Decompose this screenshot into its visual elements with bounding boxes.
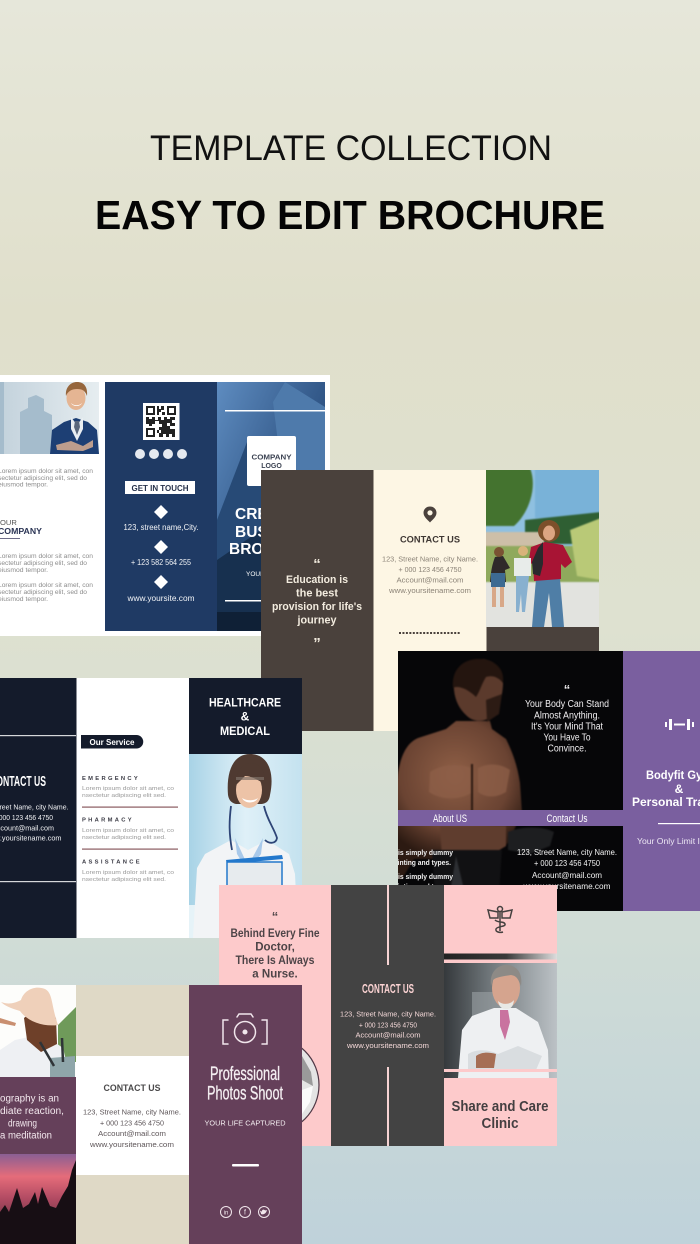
student in red shirt	[528, 520, 572, 627]
left text	[398, 850, 453, 885]
dark quote column: ”	[313, 635, 321, 652]
panel: navy contact column	[105, 382, 217, 631]
logo box: COMPANY	[252, 454, 292, 462]
heading block: healthcare and medical	[189, 678, 302, 754]
pink quote column: “	[272, 909, 278, 924]
text block: lorem bottom: Lorem ipsum dolor sit amet, con	[0, 582, 93, 589]
icon: qr code	[143, 403, 180, 440]
text block: lorem top: sectetur adipiscing elit, sed do	[0, 475, 87, 482]
cover heading: Professional	[210, 1064, 280, 1085]
plum text block: a meditation	[0, 1130, 52, 1142]
photo: students	[484, 468, 601, 629]
quote text: “	[564, 682, 570, 697]
dark contact column	[331, 885, 444, 1146]
pink quote column: a Nurse.	[252, 968, 298, 980]
cover tagline: YOUR TAGLINE	[246, 571, 294, 578]
contact text: www.yoursitename.com	[522, 882, 610, 891]
service: assistance: Lorem ipsum dolor sit amet, co	[82, 870, 174, 876]
icon: caduceus	[488, 906, 512, 932]
service: emergency: Lorem ipsum dolor sit amet, co	[82, 786, 174, 792]
icon: camera	[223, 1014, 267, 1044]
quote text: Almost Anything.	[534, 710, 600, 722]
cream contact column: CONTACT US	[400, 534, 461, 546]
cover title: CREATIVE	[235, 506, 312, 523]
service: assistance: nsectetur adipiscing elit sed.	[82, 877, 166, 883]
cream contact column	[374, 470, 486, 731]
cream contact column: + 000 123 456 4750	[398, 565, 462, 574]
text block: lorem bottom	[0, 553, 93, 603]
phone: + 123 582 564 255	[131, 558, 192, 567]
black photo column	[394, 651, 623, 911]
service: assistance	[82, 860, 174, 883]
quote text: Convince.	[548, 744, 586, 754]
pink quote column: Doctor,	[255, 942, 295, 954]
plum text block: drawing	[8, 1118, 37, 1130]
panel: photography brochure	[0, 985, 302, 1244]
middle beige column: + 000 123 456 4750	[100, 1118, 164, 1128]
cream contact column: www.yoursitename.com	[388, 586, 471, 595]
heading: our company: OUR	[0, 518, 17, 527]
panel: education brochure	[261, 468, 601, 731]
photo: woman in hat	[0, 985, 76, 1077]
middle beige column: www.yoursitename.com	[89, 1140, 174, 1149]
white services column	[76, 678, 189, 938]
dark quote column: the best	[296, 588, 338, 600]
quote text: It's Your Mind That	[531, 722, 603, 732]
panel: corporate business brochure	[0, 375, 330, 636]
contact text: + 000 123 456 4750	[534, 859, 601, 868]
service: emergency: EMERGENCY	[82, 776, 140, 782]
left text: is simply dummy	[398, 874, 453, 881]
service: emergency	[82, 776, 174, 799]
icon: web diamond	[154, 575, 168, 589]
photo: male doctor	[444, 963, 557, 1078]
left text: rinting and types.	[395, 884, 451, 891]
address: 123, street name,City.	[124, 523, 198, 532]
icons: social: f	[244, 1210, 246, 1216]
photo: athlete	[398, 658, 554, 885]
plum text block: ography is an	[0, 1094, 59, 1104]
contact text: Account@mail.com	[532, 871, 602, 880]
button: get in touch: GET IN TOUCH	[132, 484, 189, 493]
tagline: YOUR LIFE CAPTURED	[204, 1118, 286, 1128]
icon: phone diamond	[154, 540, 168, 554]
dark contact column: 123, Street Name, city Name.	[340, 1010, 436, 1018]
panel: healthcare brochure	[0, 678, 302, 938]
cream contact column: Account@mail.com	[396, 576, 464, 584]
dark contact column: Account@mail.com	[356, 1030, 420, 1040]
stethoscope	[230, 806, 277, 850]
service: pharmacy: nsectetur adipiscing elit sed.	[82, 835, 166, 841]
purple cover column	[623, 651, 700, 911]
dark contact column: www.yoursitename.com	[346, 1041, 429, 1050]
circular photo fragment	[223, 1037, 319, 1133]
quote text: You Have To	[544, 732, 591, 744]
dark contact column: + 000 123 456 4750	[359, 1020, 417, 1030]
plum text block	[0, 1077, 76, 1154]
dark footer block	[486, 627, 599, 731]
heading block: healthcare and medical: MEDICAL	[220, 724, 270, 738]
icon: dumbbell	[665, 719, 694, 730]
contact text: 123, Street Name, city Name.	[517, 848, 617, 857]
cover title	[230, 508, 261, 554]
navy contact column	[0, 678, 76, 938]
text block: lorem bottom: sectetur adipiscing elit, sed do	[0, 589, 87, 596]
pill: our service: Our Service	[90, 738, 135, 747]
heading block: healthcare and medical: HEALTHCARE	[209, 696, 281, 710]
quote text	[525, 682, 609, 754]
left text: rinting and types.	[395, 860, 451, 867]
cover heading	[207, 1064, 283, 1104]
heading: easy to edit brochure: EASY TO EDIT BROCHURE	[95, 192, 605, 238]
photo: sunset trees	[0, 1154, 76, 1244]
cover heading: Photos Shoot	[207, 1084, 283, 1104]
pink quote column: There Is Always	[236, 955, 314, 967]
icons: social circles	[135, 449, 187, 459]
dark quote column: “	[313, 556, 321, 573]
photo: businessman	[0, 382, 99, 454]
purple band	[398, 810, 623, 826]
divider dash	[232, 1164, 259, 1166]
text block: lorem top: Lorem ipsum dolor sit amet, con	[0, 468, 93, 475]
icons: social: in	[224, 1210, 228, 1216]
pill: our service	[81, 735, 143, 748]
purple cover column: &	[675, 782, 684, 796]
website: www.yoursite.com	[126, 594, 194, 603]
service: assistance: ASSISTANCE	[82, 860, 142, 866]
button: get in touch	[125, 481, 195, 494]
cream contact column: 123, Street Name, city Name.	[382, 554, 478, 564]
right pink column: Share and Care	[452, 1099, 548, 1115]
two girls	[490, 546, 531, 612]
cover title: BUSINESS	[235, 524, 314, 541]
heading block: healthcare and medical: &	[241, 710, 250, 724]
icon: location diamond	[154, 505, 168, 519]
cover photo: skyscraper	[217, 382, 325, 631]
panel: clinic brochure	[219, 885, 557, 1146]
title	[95, 129, 605, 238]
left text: is simply dummy	[398, 850, 453, 857]
heading: our company	[0, 520, 42, 539]
text block: lorem bottom: sectetur adipiscing elit, sed do	[0, 560, 87, 567]
middle beige column	[76, 985, 189, 1244]
logo box: LOGO	[261, 463, 282, 470]
plum text block: diate reaction,	[0, 1106, 64, 1117]
middle beige column: 123, Street Name, city Name.	[83, 1108, 181, 1116]
clipboard	[226, 855, 283, 885]
pink quote column: Behind Every Fine	[230, 928, 320, 940]
text block: lorem bottom: Lorem ipsum dolor sit amet, con	[0, 553, 93, 560]
purple band: Contact Us	[546, 813, 588, 825]
service: emergency: nsectetur adipiscing elit sed.	[82, 793, 166, 799]
contact text	[517, 848, 617, 891]
right pink column: Clinic	[482, 1116, 518, 1132]
logo box	[247, 436, 296, 486]
service: pharmacy: Lorem ipsum dolor sit amet, co	[82, 828, 174, 834]
panel: gym brochure	[394, 651, 700, 911]
cover title: BROCHURE	[229, 541, 319, 558]
middle beige column: CONTACT US	[104, 1083, 160, 1093]
icons: social	[220, 1206, 270, 1218]
dark contact column: CONTACT US	[362, 981, 414, 996]
middle beige column: Account@mail.com	[98, 1129, 166, 1138]
pink quote column	[219, 885, 331, 1146]
right pink column	[444, 885, 557, 1146]
quote text: Your Body Can Stand	[525, 699, 609, 710]
dark quote column: Education is	[286, 574, 348, 586]
purple band: About US	[433, 813, 467, 825]
heading: template collection: TEMPLATE COLLECTION	[150, 129, 552, 168]
plum cover column	[189, 985, 302, 1244]
icon: map pin	[424, 506, 436, 522]
service: pharmacy: PHARMACY	[82, 818, 134, 824]
dark quote column: provision for life's	[272, 601, 362, 613]
photo: female doctor	[189, 754, 302, 938]
service: pharmacy	[82, 818, 174, 841]
text block: lorem top	[0, 468, 93, 488]
dark quote column	[261, 470, 374, 731]
dark quote column: journey	[297, 614, 337, 626]
